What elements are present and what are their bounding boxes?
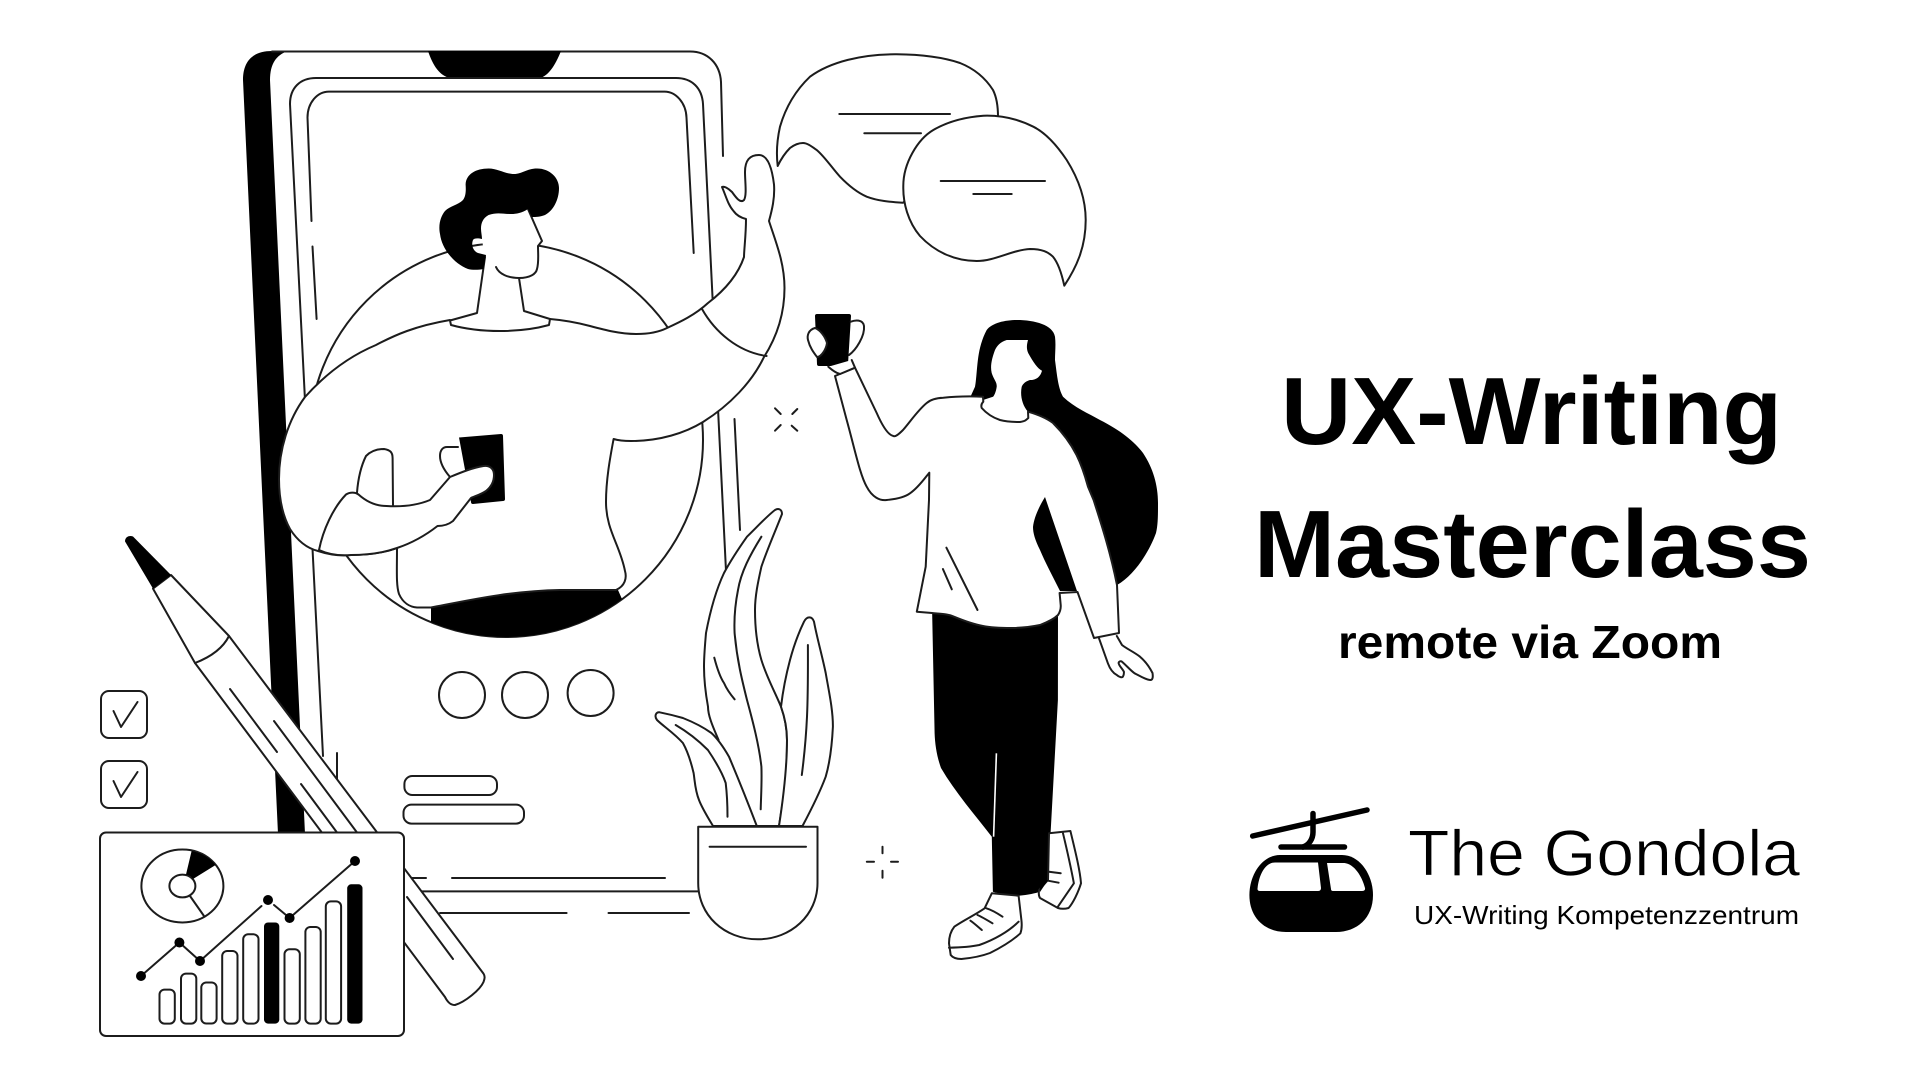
sparkle lower: [867, 847, 898, 878]
finger behind arm: [357, 449, 393, 505]
logo name: The Gondola: [1408, 816, 1801, 890]
trouser seam: [994, 753, 996, 837]
head and neck fill: [450, 209, 550, 328]
woman with phone: [808, 314, 1158, 959]
checklist icons: [101, 691, 147, 808]
hair behind arm: [1033, 497, 1077, 591]
big leaf veins: [714, 537, 762, 809]
fingers over phone: [808, 328, 827, 357]
shirt creases: [943, 548, 978, 610]
right leaf: [779, 617, 833, 826]
plant pot: [698, 827, 818, 939]
pencil lines: [230, 689, 453, 959]
thumb behind phone: [440, 447, 458, 477]
speech lines front: [941, 181, 1045, 194]
neck and collar lines: [450, 209, 550, 331]
wrist: [828, 360, 855, 374]
subtitle: remote via Zoom: [1338, 616, 1722, 668]
logo tagline: UX-Writing Kompetenzzentrum: [1414, 900, 1799, 930]
phone in woman's hand: [815, 314, 851, 366]
sparkle upper: [775, 408, 797, 431]
checkbox one: [101, 691, 147, 738]
pencil body: [153, 575, 485, 1005]
pencil collar: [195, 636, 229, 663]
left leaf vein: [676, 725, 728, 817]
three round buttons: [439, 670, 614, 718]
checkbox two: [101, 761, 147, 808]
sleeve crease: [702, 309, 767, 356]
cup handle shaped fingers: [849, 320, 864, 355]
hanging hand: [1099, 636, 1153, 680]
speech bubble front: [903, 116, 1086, 286]
pencil: [125, 536, 485, 1005]
donut chart: [141, 850, 223, 922]
line chart: [136, 856, 360, 981]
phone black side band: [243, 51, 305, 834]
card frame: [100, 832, 404, 1036]
title line two: Masterclass: [1254, 491, 1811, 598]
back shoe: [1039, 831, 1081, 909]
forearm and hand: [319, 466, 494, 555]
logo: The Gondola: [1249, 810, 1801, 932]
phone screen edge: [308, 92, 740, 530]
long hair: [970, 320, 1158, 592]
big leaf: [704, 509, 787, 826]
background circle: [309, 243, 703, 637]
sparkle decorations: [775, 408, 898, 878]
bar chart: [160, 884, 362, 1024]
phone in hand: [459, 434, 505, 504]
phone bottom lines: [337, 753, 699, 913]
hair: [439, 168, 559, 270]
two text bars: [404, 776, 524, 824]
analytics card: [100, 832, 404, 1036]
title line one: UX-Writing: [1281, 358, 1782, 465]
phone frame: [290, 78, 726, 756]
speech bubbles: [777, 54, 1086, 286]
trousers: [431, 590, 622, 637]
speech bubble back: [777, 54, 998, 203]
pencil tip: [125, 536, 171, 589]
pot rim line: [710, 846, 806, 848]
speech lines back: [839, 114, 950, 133]
trousers: [932, 605, 1058, 896]
left leaf: [656, 712, 757, 826]
phone notch: [428, 51, 561, 78]
right leaf vein: [802, 645, 808, 775]
torso and raised arm: [279, 155, 784, 608]
title: [1254, 358, 1811, 668]
front shoe: [949, 893, 1022, 959]
man waving from phone: [279, 155, 784, 650]
illustration: smartphone: [243, 51, 740, 913]
screen controls: [404, 670, 614, 824]
phone outer outline: [272, 52, 723, 156]
shirt and arms: [835, 368, 1119, 638]
potted plant: [656, 509, 833, 939]
gondola icon: [1249, 810, 1373, 932]
